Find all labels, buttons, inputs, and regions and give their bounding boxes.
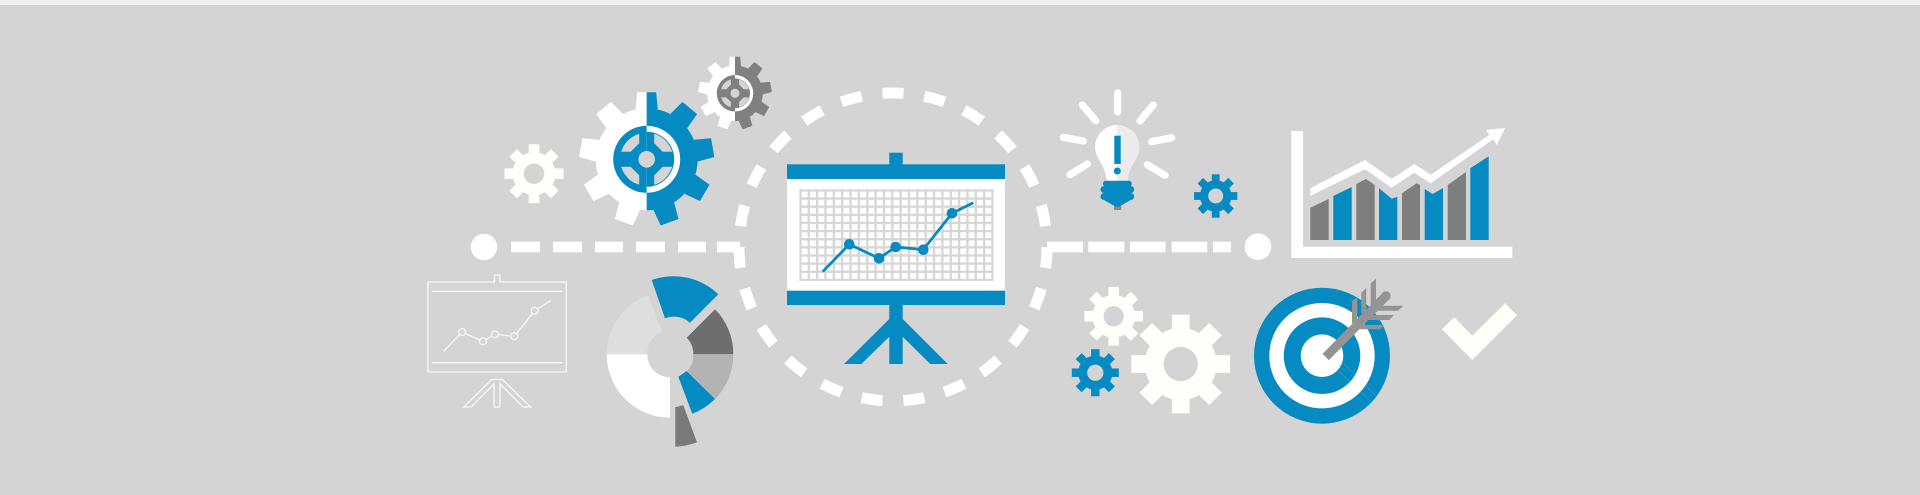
segment: blue top: [652, 276, 718, 323]
outlined board stand: [464, 380, 531, 407]
bulb rays: [1063, 93, 1172, 175]
icon: large blue and white gear: [579, 92, 715, 226]
segment: small blue: [678, 371, 715, 414]
bar chart with rising arrow: [1291, 128, 1512, 258]
icon: grey and white gear: [698, 57, 772, 130]
board stand: [844, 305, 948, 364]
board grid: [799, 189, 994, 281]
icon: small white gear upper left: [504, 144, 564, 203]
segment: dark grey: [687, 309, 733, 354]
icon: light bulb with rays: [1063, 93, 1172, 210]
rising arrow: [1310, 128, 1505, 196]
segment: mid grey: [687, 354, 733, 399]
dashed connector: right: [1047, 233, 1271, 260]
segment: pale grey: [607, 295, 662, 354]
target arrow: [1326, 279, 1403, 357]
dashed circle around presentation board: [739, 93, 1047, 401]
dashed connector: left: [471, 234, 740, 260]
chart bars: [1310, 156, 1489, 240]
chart axes: [1291, 131, 1512, 258]
icon: check mark: [1442, 303, 1517, 360]
pie chart of exploded segments: [607, 276, 733, 447]
outlined board trend line: [443, 301, 551, 352]
segment: white: [607, 354, 670, 418]
presentation board: central blue: [787, 153, 1005, 364]
icon: target with arrow: [1254, 279, 1403, 424]
segment: detached grey: [675, 405, 697, 447]
board trend line: [823, 203, 973, 272]
icon: cluster of three gears: [1072, 287, 1230, 413]
icon: small blue gear by bulb: [1194, 174, 1237, 218]
presentation board: outlined: [428, 275, 566, 407]
